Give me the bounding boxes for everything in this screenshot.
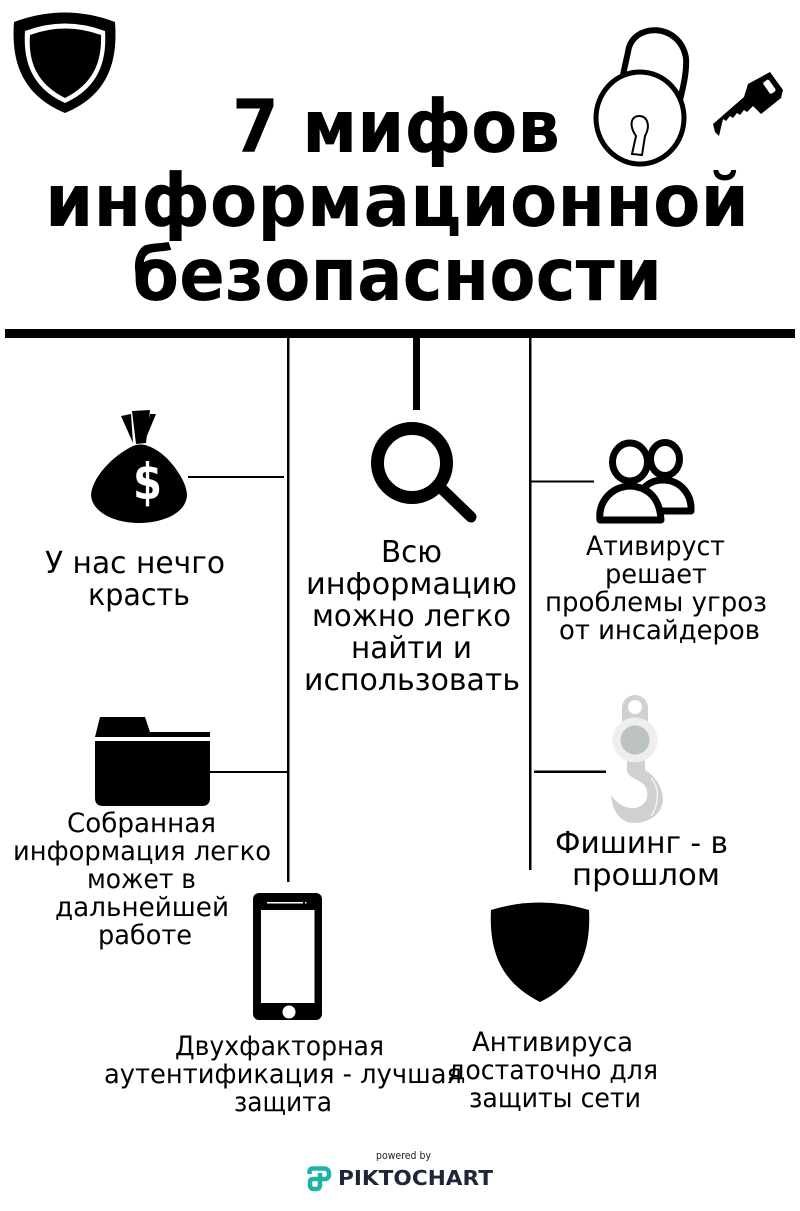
myth: all information is easy to find: можно легко <box>312 599 511 634</box>
myth: all information is easy to find: использовать <box>304 663 520 698</box>
myth: nothing to steal <box>45 546 225 613</box>
myth: all information is easy to find: Всю <box>381 535 442 570</box>
myth: antivirus and insiders: решает <box>605 559 707 590</box>
myth: antivirus and insiders: от инсайдеров <box>559 615 760 646</box>
myth: collected information: информация легко <box>13 836 271 867</box>
icon: padlock <box>596 30 686 164</box>
myth: two-factor authentication: Двухфакторная <box>175 1031 384 1062</box>
title <box>45 85 749 318</box>
icon: smartphone <box>253 893 322 1020</box>
myth: all information is easy to find <box>304 535 520 698</box>
myth: collected information: дальнейшей <box>55 892 229 923</box>
myth: two-factor authentication: аутентификация - лучшая <box>104 1059 462 1090</box>
myth: phishing: Фишинг - в <box>555 826 728 861</box>
icon: money bag: $ <box>133 453 162 511</box>
icon: piktochart logo <box>310 1168 329 1189</box>
myth: phishing <box>555 826 728 893</box>
myth: collected information <box>13 808 271 951</box>
icon: key <box>713 72 783 136</box>
myth: two-factor authentication: защита <box>234 1087 332 1118</box>
icon: folder <box>95 717 210 806</box>
myth: phishing: прошлом <box>572 858 720 893</box>
myth: nothing to steal: красть <box>88 578 190 613</box>
myth: antivirus and insiders: Ативируст <box>586 531 725 562</box>
myth: collected information: работе <box>98 920 192 951</box>
myth: antivirus is enough <box>448 1027 658 1114</box>
myth: collected information: может в <box>87 864 196 895</box>
icon: solid shield <box>491 902 589 1002</box>
myth: antivirus is enough: достаточно для <box>448 1055 658 1086</box>
footer: powered by Piktochart: PIKTOCHART <box>338 1166 493 1190</box>
icon: crane hook <box>611 695 663 823</box>
timeline connector lines <box>5 329 795 882</box>
footer: powered by Piktochart: powered by <box>376 1149 431 1162</box>
footer: powered by Piktochart <box>310 1149 493 1190</box>
myth: all information is easy to find: информацию <box>306 567 517 602</box>
myth: antivirus and insiders <box>545 531 767 646</box>
myth: collected information: Собранная <box>67 808 216 839</box>
title: информационной <box>45 159 749 244</box>
icon: money bag <box>91 410 187 523</box>
myth: antivirus is enough: Антивируса <box>472 1027 633 1058</box>
icon: shield outline <box>14 12 115 113</box>
myth: all information is easy to find: найти и <box>351 631 472 666</box>
myth: two-factor authentication <box>104 1031 462 1118</box>
title: безопасности <box>132 233 662 318</box>
icon: users <box>600 442 691 520</box>
myth: antivirus is enough: защиты сети <box>469 1083 641 1114</box>
title: 7 мифов <box>232 85 560 170</box>
icon: magnifier <box>378 428 471 517</box>
myth: antivirus and insiders: проблемы угроз <box>545 587 767 618</box>
myth: nothing to steal: У нас нечго <box>45 546 225 581</box>
